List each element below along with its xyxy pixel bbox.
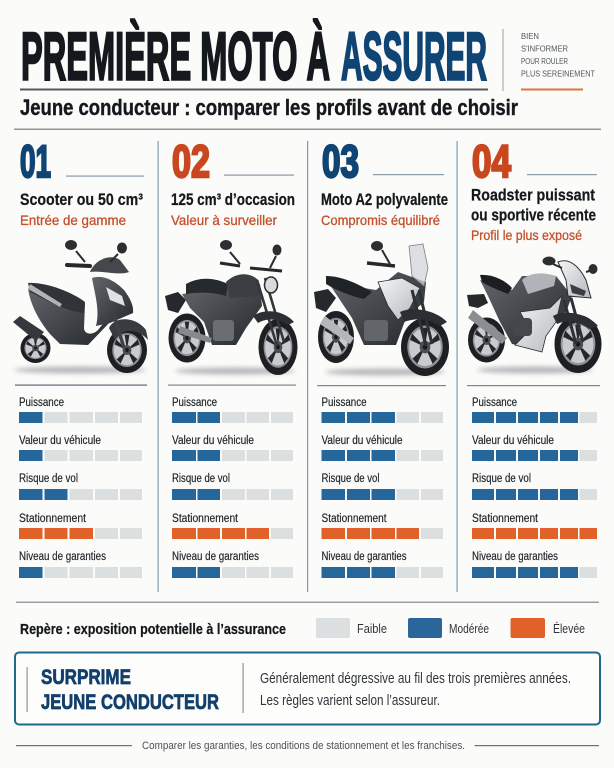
- metrics: [317, 385, 446, 578]
- metrics: [15, 384, 147, 578]
- panel: profile 02: [165, 136, 298, 578]
- legend: Faible: [357, 622, 387, 636]
- legend: [20, 618, 585, 638]
- side note: POUR ROULER: [521, 57, 568, 66]
- metrics: Niveau de garanties: [472, 551, 558, 563]
- metrics: Puissance: [322, 397, 366, 409]
- panel: profile 02: 02: [172, 136, 210, 187]
- legend: Élevée: [553, 621, 585, 636]
- panel: profile 03: [314, 136, 449, 578]
- metrics: Risque de vol: [19, 473, 78, 485]
- icon: sport motorcycle: [467, 256, 602, 374]
- callout: surprime jeune conducteur: JEUNE CONDUCTEUR: [41, 691, 219, 714]
- metrics: Puissance: [472, 397, 517, 409]
- metrics: Niveau de garanties: [19, 551, 106, 563]
- side note: [521, 32, 595, 90]
- metrics: Stationnement: [322, 513, 387, 525]
- metrics: Niveau de garanties: [172, 551, 259, 563]
- metrics: Stationnement: [172, 513, 239, 525]
- callout: surprime jeune conducteur: SURPRIME: [41, 666, 131, 689]
- panel: profile 01: Entrée de gamme: [20, 212, 126, 228]
- metrics: Valeur du véhicule: [322, 435, 402, 447]
- side note: PLUS SEREINEMENT: [521, 70, 595, 78]
- metrics: Puissance: [19, 397, 64, 409]
- metrics: [168, 384, 296, 578]
- icon: scooter: [13, 240, 148, 374]
- panel: profile 01: Scooter ou 50 cm³: [20, 190, 143, 209]
- panel: profile 04: Profil le plus exposé: [471, 227, 582, 243]
- metrics: Stationnement: [19, 513, 87, 525]
- callout: surprime jeune conducteur: Les règles varient selon l’assureur.: [260, 693, 440, 709]
- panel: profile 04: 04: [472, 136, 511, 187]
- metrics: Valeur du véhicule: [472, 435, 554, 447]
- side note: BIEN: [521, 32, 539, 41]
- panel: profile 03: Moto A2 polyvalente: [321, 190, 448, 209]
- metrics: Niveau de garanties: [322, 551, 407, 563]
- metrics: Stationnement: [472, 513, 539, 525]
- panel: profile 02: 125 cm³ d’occasion: [171, 190, 295, 209]
- side note: S'INFORMER: [521, 44, 568, 54]
- subtitle: Jeune conducteur : comparer les profils avant de choisir: [20, 95, 518, 120]
- metrics: Puissance: [172, 397, 217, 409]
- callout: surprime jeune conducteur: [15, 652, 600, 724]
- panel: profile 04: [467, 136, 602, 578]
- panel: profile 02: Valeur à surveiller: [171, 212, 277, 228]
- panel: profile 01: 01: [20, 136, 51, 187]
- metrics: Valeur du véhicule: [172, 435, 254, 447]
- metrics: [467, 385, 600, 578]
- metrics: Risque de vol: [322, 473, 380, 485]
- panel: profile 01: [13, 136, 148, 578]
- icon: A2 touring motorcycle: [314, 241, 449, 376]
- icon: naked 125 motorcycle: [165, 240, 298, 375]
- metrics: Risque de vol: [472, 473, 531, 485]
- column dividers: [158, 141, 458, 592]
- metrics: Valeur du véhicule: [19, 435, 101, 447]
- panel: profile 03: Compromis équilibré: [321, 212, 440, 228]
- panel: profile 03: 03: [322, 136, 359, 187]
- legend: Modérée: [449, 622, 489, 636]
- footer note: Comparer les garanties, les conditions de stationnement et les franchises.: [142, 740, 465, 752]
- legend: Repère : exposition potentielle à l’assurance: [20, 621, 286, 638]
- metrics: Risque de vol: [172, 473, 230, 485]
